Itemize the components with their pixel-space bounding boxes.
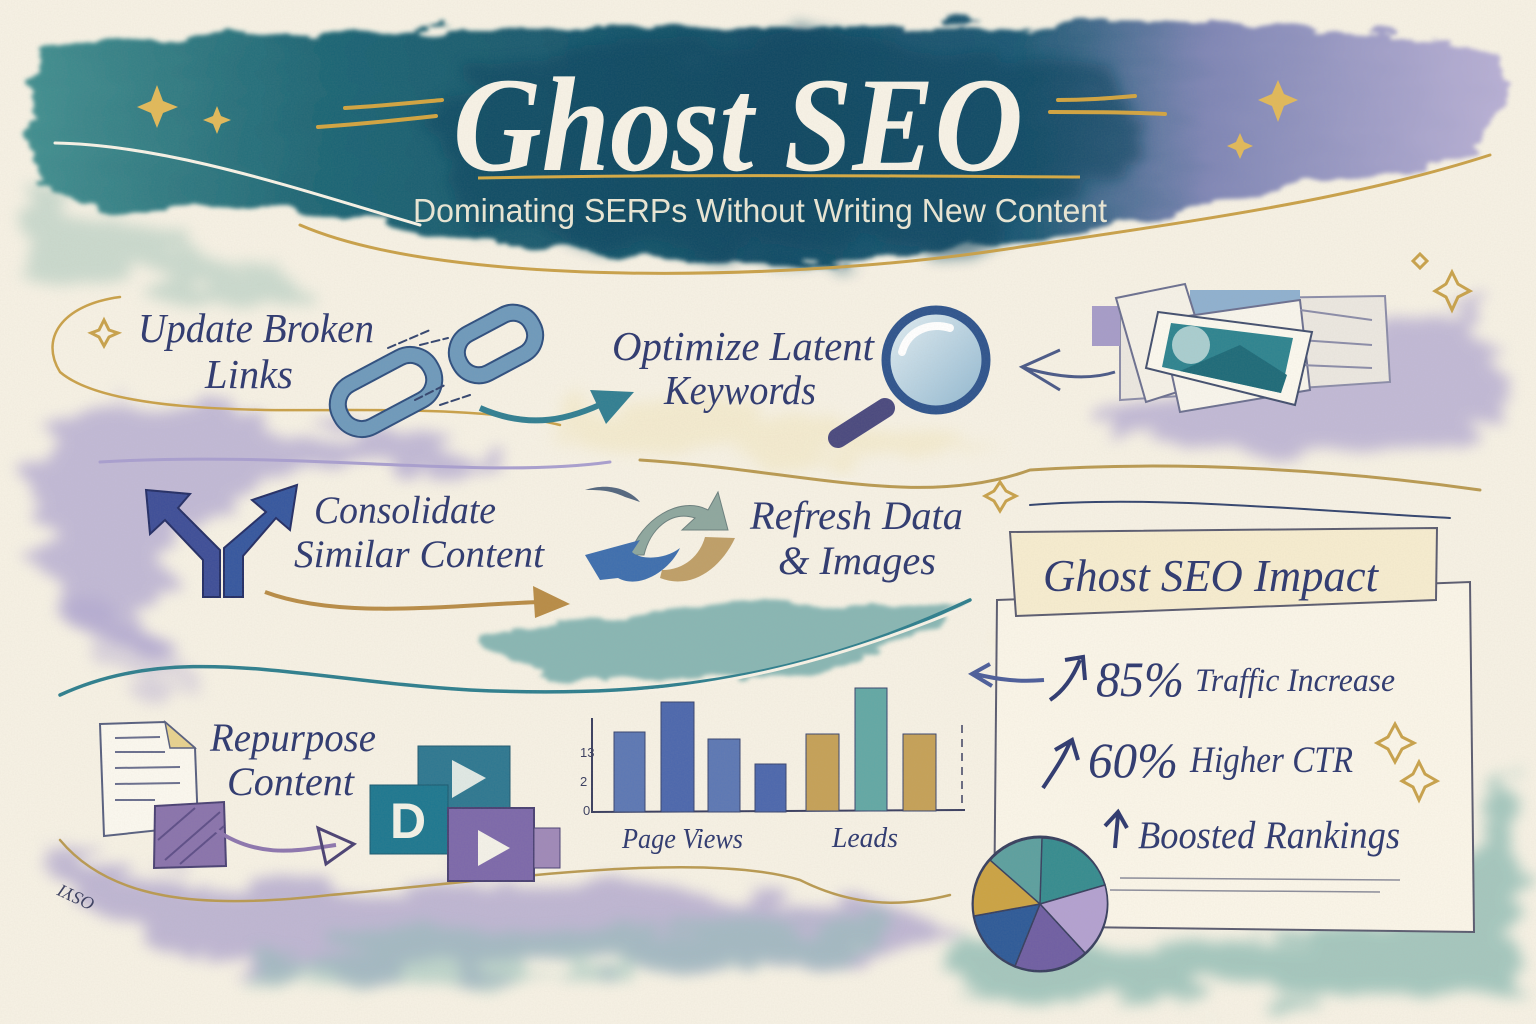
purple card (154, 802, 226, 868)
axes (592, 718, 965, 812)
heading ribbon (1010, 528, 1437, 616)
label: Repurpose (209, 715, 376, 760)
icon: stack of pages with photo (1022, 254, 1470, 412)
arrow (480, 390, 634, 424)
header banner (28, 22, 1502, 262)
sparkle (985, 482, 1016, 511)
sparkles (1377, 724, 1437, 800)
axis ticks: 2 (580, 774, 587, 789)
icon: magnifying glass (838, 310, 986, 438)
small corner note: OSYI (54, 880, 98, 915)
label: Links (204, 351, 293, 397)
axis ticks (580, 745, 594, 818)
label: Update Broken (138, 305, 374, 351)
sparkles (137, 80, 1298, 159)
item: update broken links (91, 305, 634, 437)
stat: rankings: Boosted Rankings (1138, 814, 1400, 857)
footer lines (1110, 878, 1400, 892)
watercolor washes (20, 180, 1520, 1000)
media tiles (370, 746, 560, 881)
arrow (265, 586, 570, 618)
label: Content (227, 759, 355, 804)
icon: refresh arrows (585, 487, 735, 582)
axis ticks: 13 (580, 745, 594, 760)
bars (614, 688, 936, 812)
stat: 60% (1043, 732, 1353, 788)
photo card (1146, 312, 1312, 405)
decorative white and gold swooshes (52, 143, 1490, 903)
chart labels: Page Views (621, 824, 743, 855)
icon: broken chain (330, 305, 543, 437)
gold title underline (478, 176, 1080, 178)
item: refresh data and images (749, 482, 1016, 583)
label: Refresh Data (749, 493, 963, 538)
stat: 60%: 60% (1088, 732, 1178, 788)
label: Keywords (663, 367, 816, 413)
stat: 60%: Higher CTR (1189, 740, 1353, 781)
banner wash (28, 22, 1502, 262)
icon: branching arrows (146, 485, 297, 597)
arrow (1022, 350, 1115, 390)
panel: ghost seo impact (972, 528, 1474, 971)
heading ribbon: Ghost SEO Impact (1043, 550, 1379, 601)
media tiles: D (390, 793, 426, 849)
label: Similar Content (294, 533, 545, 576)
axis ticks: 0 (583, 803, 590, 818)
sparkle (91, 320, 118, 346)
label: & Images (778, 538, 936, 583)
bar chart (580, 688, 965, 855)
label: Consolidate (314, 489, 496, 532)
arrow (216, 828, 354, 864)
item: consolidate similar content (265, 489, 570, 618)
panel card (994, 582, 1474, 932)
document icon (100, 722, 198, 836)
item: optimize latent keywords (612, 310, 986, 438)
left arrow (972, 664, 1044, 686)
subtitle: Dominating SERPs Without Writing New Content (413, 192, 1107, 229)
label: Optimize Latent (612, 323, 876, 369)
gold dashes (318, 96, 1165, 127)
stat: 85% (1050, 651, 1395, 707)
title: Ghost SEO (453, 51, 1023, 200)
item: repurpose content (100, 715, 560, 881)
sparkles (1435, 272, 1470, 310)
icon: pie chart (973, 837, 1107, 971)
chart labels: Leads (831, 823, 898, 854)
stat: 85%: Traffic Increase (1195, 663, 1395, 699)
stat: 85%: 85% (1096, 651, 1184, 707)
